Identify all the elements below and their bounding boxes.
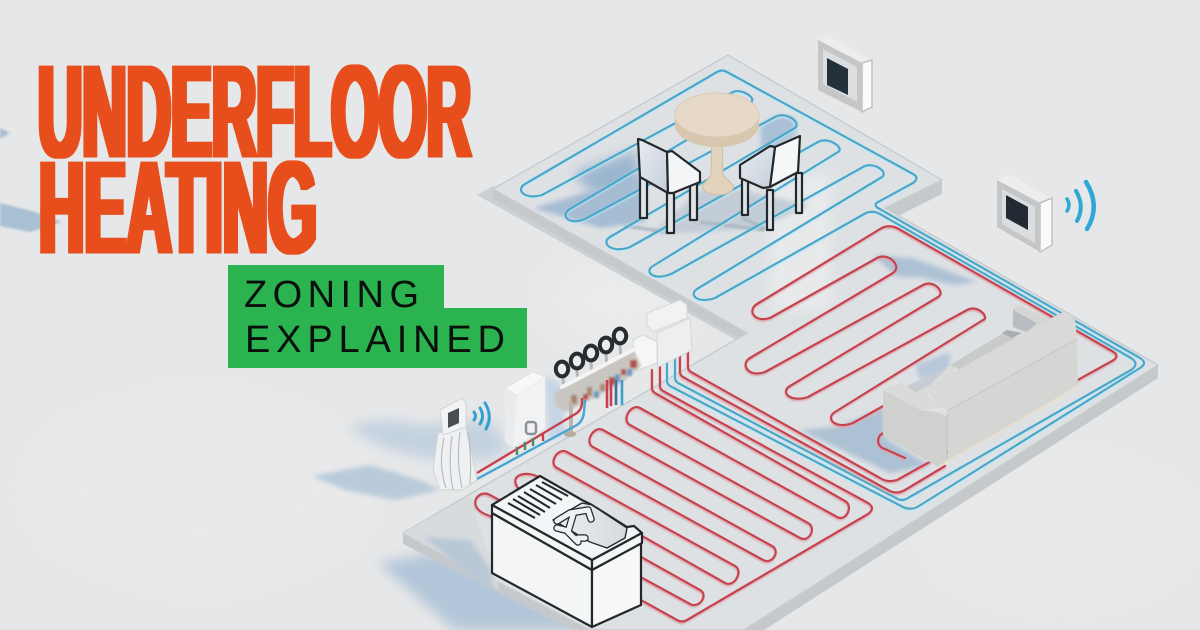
- boxes at manifold: [633, 300, 692, 370]
- icon: wifi small: [474, 403, 489, 429]
- faucet: [557, 510, 591, 542]
- near arm top: [883, 365, 957, 410]
- plate soft edge shadow: [477, 186, 755, 345]
- text: UNDERFLOOR: [38, 38, 471, 185]
- pipes: blue zone: [521, 70, 1144, 509]
- far arm: [1013, 305, 1050, 334]
- plate top surface: [403, 55, 1158, 630]
- boiler: [505, 372, 545, 447]
- near arm inner: [907, 368, 947, 393]
- subtitle badge: [228, 265, 527, 368]
- table: [675, 93, 759, 195]
- pipes: red zones: [475, 226, 1117, 622]
- title: [38, 38, 471, 281]
- right face: [592, 543, 641, 627]
- legs: [742, 173, 802, 230]
- end face: [883, 390, 947, 467]
- fittings: [555, 350, 641, 412]
- icon: thermostat dining: [818, 36, 872, 112]
- chair right: [740, 136, 802, 230]
- cushion seam: [947, 339, 1077, 460]
- bar: [562, 350, 633, 387]
- soft reflections: [770, 175, 830, 310]
- floor shadows: [424, 116, 977, 592]
- subtitle badge: EXPLAINED: [245, 319, 505, 361]
- seat cushions: [950, 332, 1020, 372]
- gauge stems: [563, 345, 621, 392]
- icon: thermostat living: [997, 174, 1052, 252]
- gauges: [556, 329, 626, 376]
- title: HEATING: [39, 134, 317, 281]
- back top: [928, 312, 1077, 410]
- drainer slats: [508, 482, 568, 518]
- legs: [640, 177, 697, 233]
- chair left: [638, 139, 700, 233]
- manifold: [555, 329, 641, 437]
- living room loop: [688, 226, 1116, 481]
- supply pipes: [607, 380, 611, 408]
- subtitle badge: ZONING: [244, 274, 419, 316]
- back face: [947, 340, 1078, 462]
- base trim: [938, 387, 1078, 467]
- screen box: [440, 398, 466, 435]
- ground shadows: [0, 128, 610, 630]
- floor plate: [403, 55, 1158, 630]
- worktop: [492, 476, 642, 560]
- coils: [433, 427, 477, 490]
- left face: [492, 513, 592, 627]
- kitchen loop: [475, 367, 872, 622]
- small thermostat with pipe coils: [433, 398, 477, 490]
- plate side faces: [403, 180, 1158, 630]
- kitchen sink unit: [492, 476, 642, 627]
- sofa: [883, 305, 1078, 467]
- connection pipes: [477, 398, 585, 479]
- icon: wifi living: [1067, 182, 1094, 229]
- basin: [553, 503, 627, 548]
- support: [569, 402, 573, 432]
